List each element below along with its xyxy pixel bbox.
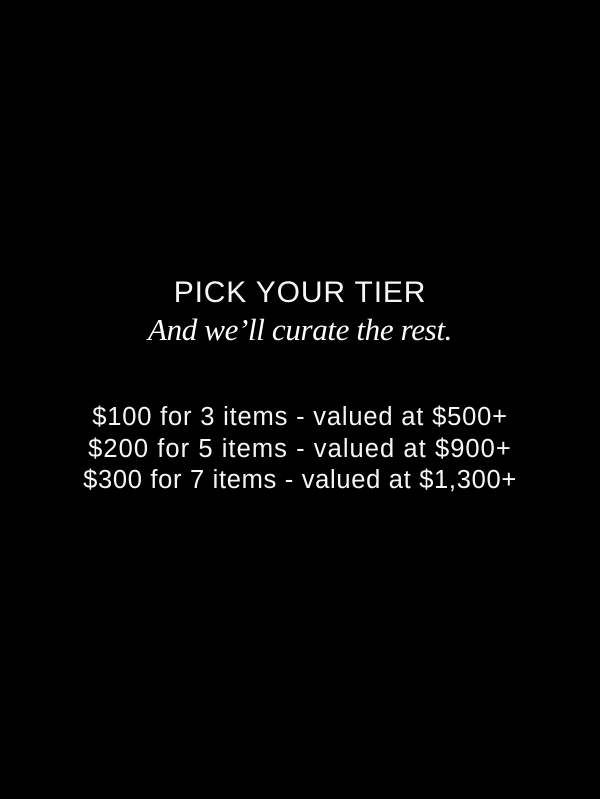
pricing tiers: $200 for 5 items - valued at $900+ <box>88 434 512 462</box>
pricing tiers <box>83 403 517 494</box>
heading: PICK YOUR TIER <box>174 276 426 309</box>
pricing tiers: $300 for 7 items - valued at $1,300+ <box>83 466 517 494</box>
tagline: And we’ll curate the rest. <box>148 312 452 347</box>
pricing tiers: $100 for 3 items - valued at $500+ <box>92 403 508 431</box>
